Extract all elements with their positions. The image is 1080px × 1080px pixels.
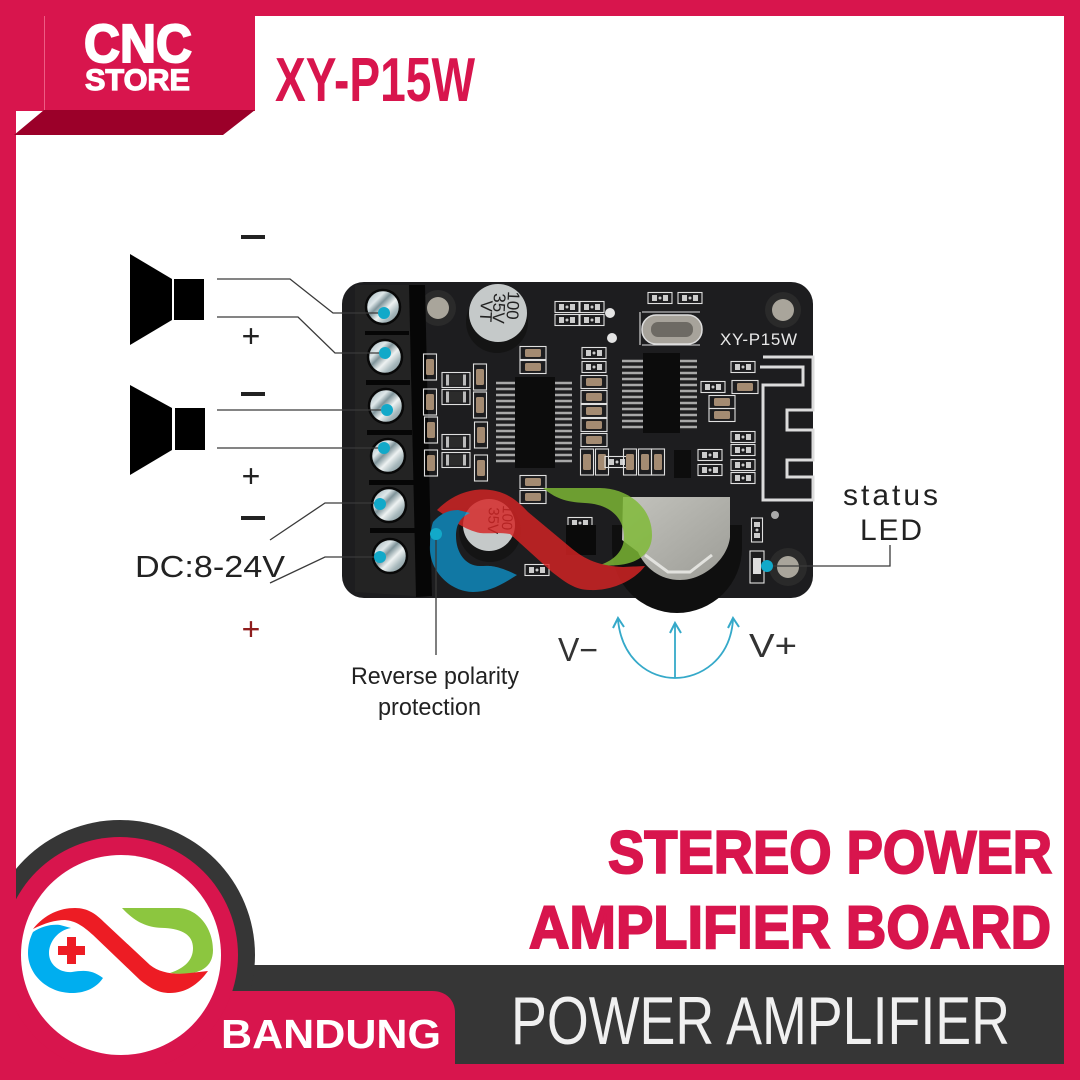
- bottom bar: [0, 820, 1064, 1080]
- label: volume knob V- V+: V−: [558, 631, 598, 668]
- capacitor 100uF top: 100: [503, 291, 523, 320]
- model heading: XY-P15W: [275, 46, 475, 115]
- circuit board: [342, 282, 813, 613]
- label: status LED: status: [843, 479, 938, 512]
- crystal: [640, 312, 702, 345]
- knob: [612, 525, 742, 613]
- logo text: STORE: STORE: [85, 64, 190, 97]
- polarity marks: +: [242, 318, 260, 354]
- terminal block: [355, 285, 432, 597]
- capacitor 100uF top: VT: [476, 300, 496, 322]
- label: volume knob V- V+: V+: [749, 627, 797, 664]
- icon: knob rotation arrows: [613, 618, 739, 678]
- diagram: wiring annotations: [130, 235, 938, 721]
- icon: speaker 1: [130, 254, 204, 345]
- logo text: CNC: CNC: [84, 14, 192, 74]
- potentiometer plate: [622, 497, 730, 580]
- product title: AMPLIFIER BOARD: [529, 894, 1051, 961]
- logo: medical cross: [58, 937, 85, 964]
- pcb: [342, 282, 813, 598]
- polarity marks: [241, 235, 265, 647]
- logo watermark on board: [430, 488, 652, 592]
- antenna: [760, 357, 813, 500]
- IC right: [622, 353, 697, 433]
- red tab: [16, 991, 455, 1064]
- capacitor 100uF bottom: 100: [498, 505, 516, 531]
- silkscreen model: XY-P15W: [720, 330, 797, 349]
- product title: [529, 819, 1052, 961]
- IC left: [496, 377, 572, 468]
- capacitor 100uF top: 35V: [488, 293, 509, 325]
- polarity marks: +: [242, 611, 260, 647]
- label: reverse polarity protection: protection: [378, 694, 481, 721]
- mounting holes: [420, 290, 807, 586]
- logo: red swoosh: [33, 908, 208, 993]
- connection dots: [374, 307, 773, 572]
- label: DC voltage: DC:8-24V: [135, 549, 285, 584]
- status led component: [752, 518, 762, 542]
- red ring: [16, 837, 238, 991]
- icon: speaker 2: [130, 385, 205, 475]
- logo: green swoosh: [122, 908, 213, 974]
- label: reverse polarity protection: Reverse polarity: [351, 663, 519, 690]
- brand ribbon: [14, 14, 255, 135]
- capacitor 100uF top: [466, 284, 528, 353]
- white disc: [21, 855, 221, 1055]
- wires: [217, 279, 890, 655]
- dark ring: [16, 820, 255, 965]
- smd components: [424, 292, 764, 583]
- polarity marks: +: [242, 458, 260, 494]
- capacitor 100uF bottom: [459, 499, 521, 562]
- label: status LED: [843, 479, 938, 547]
- capacitor 100uF bottom: 35V: [484, 507, 502, 534]
- label: reverse polarity protection: [351, 663, 519, 721]
- label: status LED: LED: [860, 514, 922, 547]
- label: volume knob V- V+: [558, 627, 797, 668]
- location label: BANDUNG: [221, 1011, 441, 1057]
- logo: blue swoosh: [28, 925, 103, 993]
